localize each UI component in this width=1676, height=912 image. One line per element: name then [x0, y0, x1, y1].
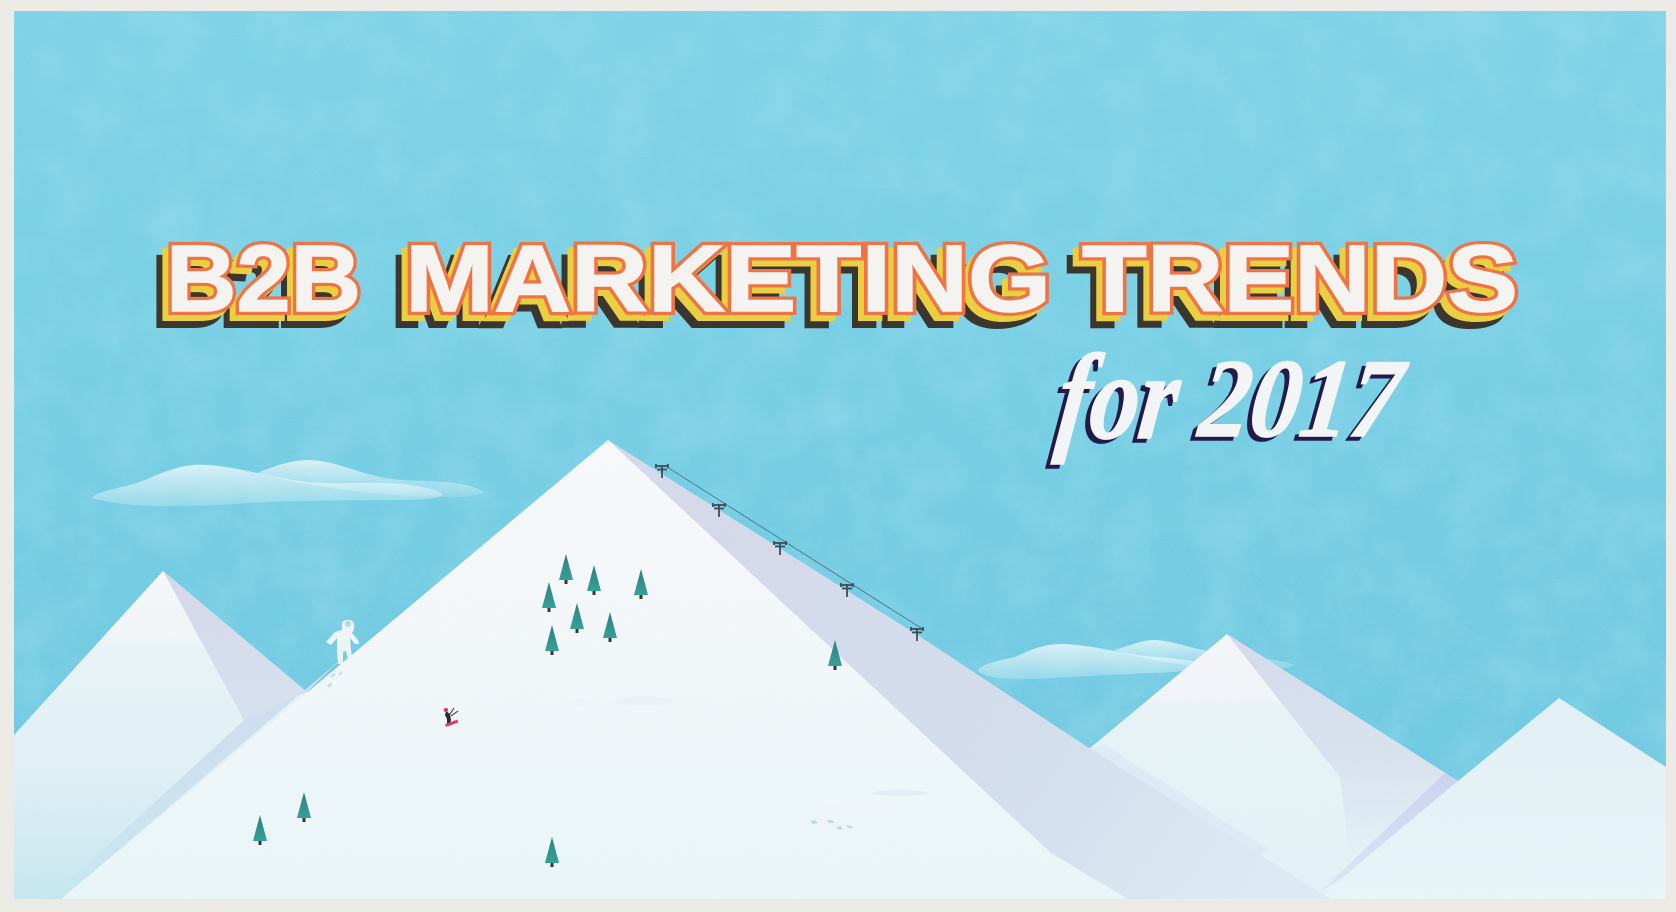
subtitle shadow layer: 2017: [1187, 341, 1407, 465]
yeti: [326, 620, 359, 688]
title orange outline layer: [166, 226, 1518, 332]
subtitle shadow layer: for: [1046, 334, 1183, 469]
cloud: left: [92, 460, 484, 506]
title white fill layer: MARKETING: [405, 226, 1051, 332]
subtitle: for 2017: [1046, 330, 1412, 469]
title yellow layer: MARKETING: [399, 232, 1045, 338]
title orange outline layer: MARKETING: [405, 226, 1051, 332]
right mountain light band: [1089, 745, 1270, 860]
title dark shadow layer: MARKETING: [393, 239, 1039, 345]
title yellow layer: [160, 232, 1512, 338]
mountain: left: [14, 571, 340, 899]
title yellow layer: TRENDS: [1076, 232, 1512, 338]
subtitle shadow layer: [1046, 334, 1407, 469]
left mountain lavender band: [112, 662, 338, 843]
title: B2B Marketing Trends: [154, 226, 1518, 345]
lift cable: [667, 467, 921, 628]
mountain: right: [1089, 634, 1458, 899]
title white fill layer: TRENDS: [1082, 226, 1518, 332]
lift pylons: [656, 464, 923, 641]
title yellow layer: B2B: [160, 232, 355, 338]
subtitle white layer: 2017: [1192, 337, 1412, 461]
cloud: right: [978, 640, 1295, 679]
left mountain shaded face: [163, 571, 307, 720]
right cloud back layer: [1114, 640, 1295, 670]
title orange outline layer: TRENDS: [1082, 226, 1518, 332]
mountain: far right: [1320, 698, 1666, 899]
title orange outline layer: B2B: [166, 226, 361, 332]
pine trees: [253, 554, 842, 867]
snowboarder: [444, 708, 458, 727]
right mountain shaded face: [1228, 634, 1444, 812]
right mountain lavender band: [1322, 773, 1458, 890]
mountain: main: [61, 440, 1331, 899]
right cloud front layer: [978, 644, 1206, 679]
left cloud back layer: [257, 460, 484, 497]
left cloud front layer: [92, 465, 442, 506]
title dark shadow layer: TRENDS: [1070, 239, 1506, 345]
title dark shadow layer: [154, 239, 1506, 345]
subtitle white layer: [1051, 330, 1412, 465]
title white fill layer: B2B: [166, 226, 361, 332]
title dark shadow layer: B2B: [154, 239, 349, 345]
footprints: [810, 820, 853, 830]
subtitle white layer: for: [1051, 330, 1188, 465]
title white fill layer: [166, 226, 1518, 332]
ski lift: [656, 464, 923, 641]
pale snow mounds: [872, 790, 928, 796]
